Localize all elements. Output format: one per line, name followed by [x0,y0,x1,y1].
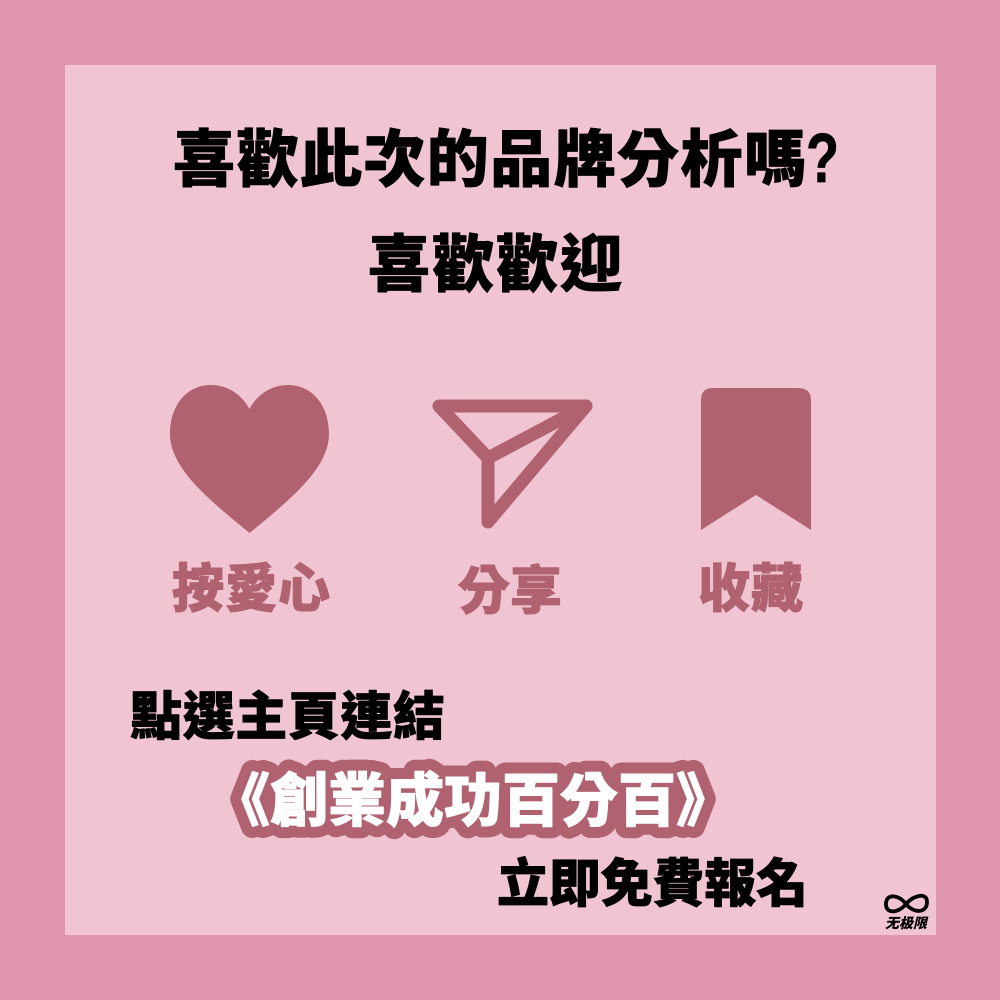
icon: share paper plane [439,406,586,522]
text: register now: 立即免費報名 [497,856,808,914]
label: share: 分享 [458,563,562,621]
label: like: 按愛心 [172,561,330,619]
label: save: 收藏 [698,561,803,619]
logo: infinity brand mark: 无极限 [885,915,929,931]
highlighted course name: 《創業成功百分百》 [212,769,734,834]
title: line two: 喜歡歡迎 [368,231,622,300]
title: line one: 喜歡此次的品牌分析嗎 [173,126,806,195]
icon: bookmark [701,388,811,530]
title: line one: ? [806,119,839,197]
inner panel [65,65,936,935]
icon: heart [170,385,329,533]
text: click homepage link: 點選主頁連結 [130,689,445,747]
logo: infinity brand mark [885,896,929,931]
highlighted course name: 《創業成功百分百》 [212,769,734,834]
